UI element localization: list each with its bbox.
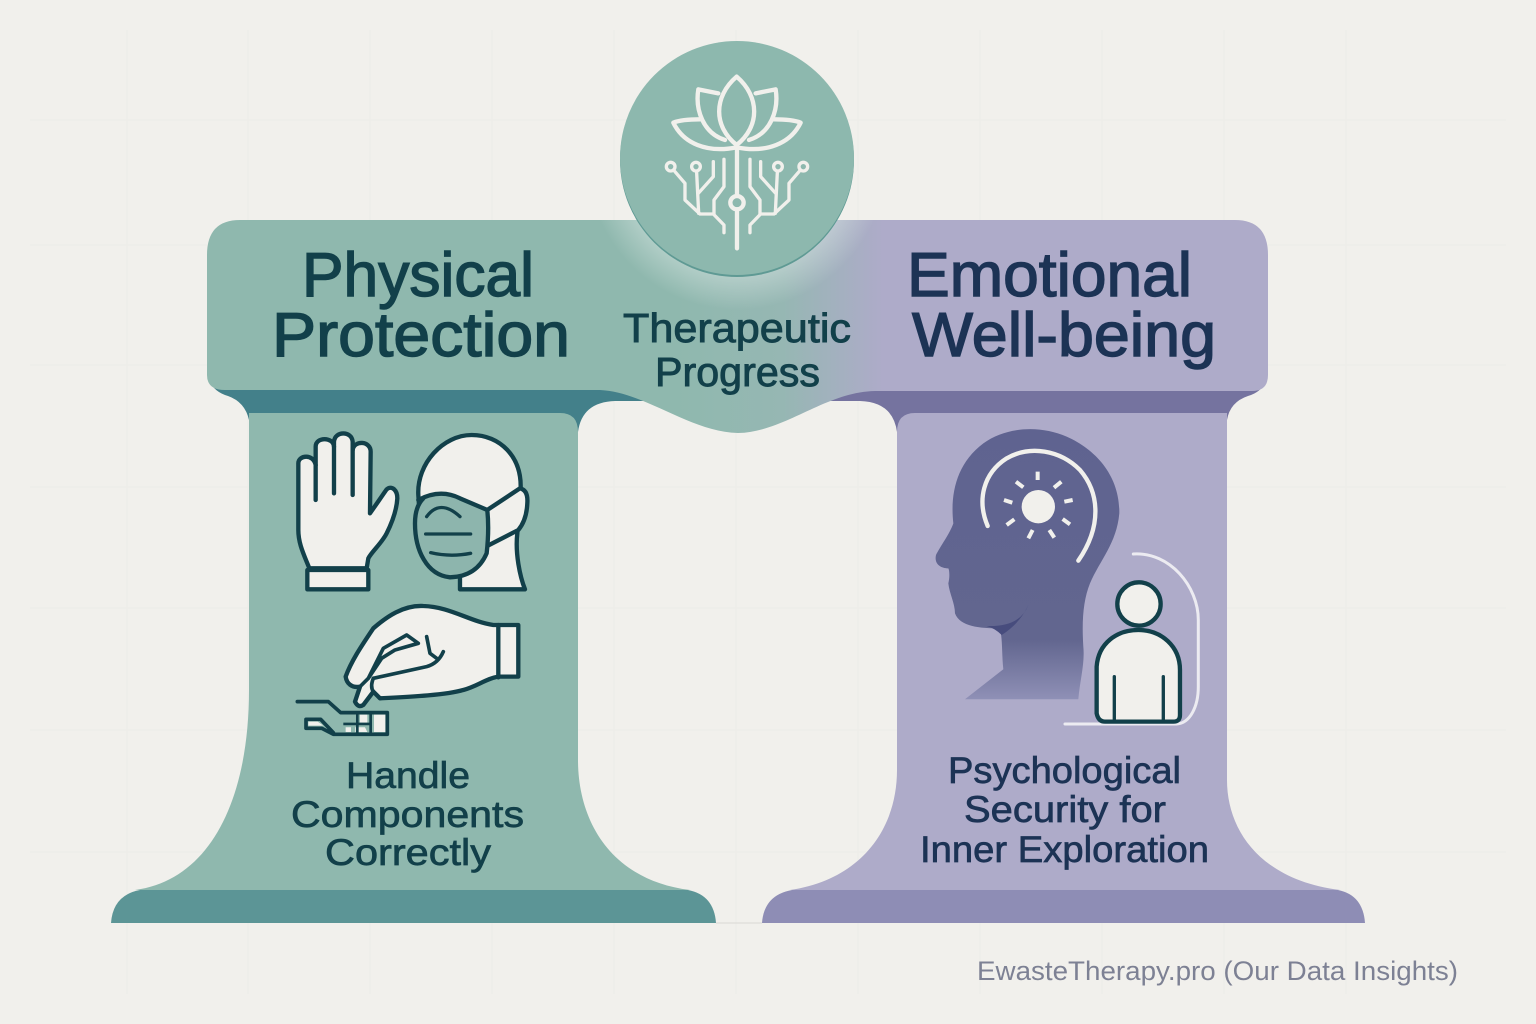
panel: top beam xyxy=(207,220,1268,433)
heading: therapeutic progress: Therapeutic xyxy=(623,305,851,351)
pillar base: teal xyxy=(111,890,716,923)
panel: emotional well-being pillar xyxy=(762,380,1365,923)
icon: lotus with circuit roots xyxy=(666,77,808,248)
heading: physical protection: Physical xyxy=(302,241,534,310)
circle glow xyxy=(609,220,862,301)
panel: physical protection pillar xyxy=(111,380,716,923)
icon: glove xyxy=(298,433,397,589)
icon: head with face mask xyxy=(415,435,527,589)
pillar base: purple xyxy=(762,890,1365,923)
text: psychological security for inner exploration: Security for xyxy=(964,789,1166,830)
text: handle components correctly: Correctly xyxy=(325,832,492,873)
text: psychological security for inner exploration: Inner Exploration xyxy=(920,829,1209,870)
icon: circuit chip xyxy=(297,702,387,734)
beam underside: purple xyxy=(828,380,1266,432)
footer credit: EwasteTherapy.pro (Our Data Insights) xyxy=(977,956,1458,986)
icon: person in safe boundary xyxy=(1065,554,1198,724)
heading: physical protection: Protection xyxy=(272,301,570,370)
icon: hand picking component xyxy=(346,606,518,706)
heading: emotional well-being: Emotional xyxy=(907,241,1192,310)
circle badge with lotus xyxy=(620,41,854,277)
heading: therapeutic progress xyxy=(623,305,851,395)
icon: head silhouette with sun xyxy=(936,429,1119,699)
heading: physical protection xyxy=(272,241,570,370)
heading: emotional well-being: Well-being xyxy=(912,301,1216,370)
beam underside: teal xyxy=(209,380,648,432)
pillar shaft: teal xyxy=(135,413,690,890)
pillar shaft: purple xyxy=(790,413,1340,890)
heading: emotional well-being xyxy=(907,241,1216,370)
text: psychological security for inner exploration: Psychological xyxy=(948,750,1181,791)
text: handle components correctly xyxy=(291,755,524,873)
text: handle components correctly: Handle xyxy=(346,755,470,796)
text: psychological security for inner exploration xyxy=(920,750,1209,870)
heading: therapeutic progress: Progress xyxy=(655,349,820,395)
text: handle components correctly: Components xyxy=(291,794,524,835)
